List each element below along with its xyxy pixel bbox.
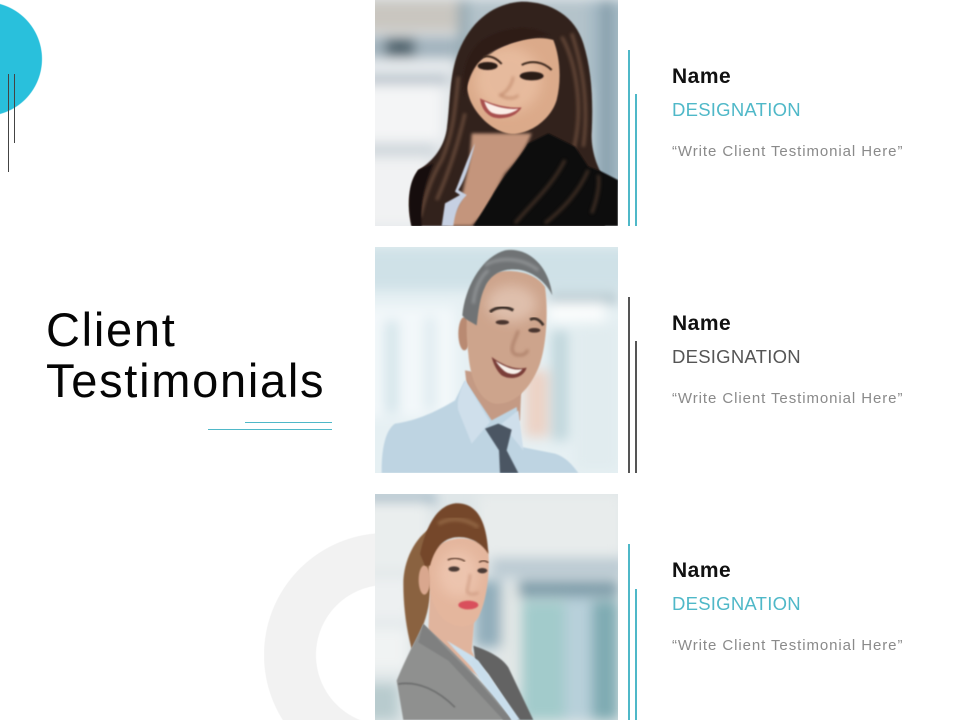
neck and chest — [428, 591, 478, 676]
face — [467, 271, 547, 404]
eyes — [478, 62, 498, 70]
ear — [458, 317, 470, 350]
designation 1: DESIGNATION — [672, 99, 801, 120]
nose shadow — [500, 77, 518, 98]
shirt — [447, 640, 508, 714]
neck — [465, 370, 522, 429]
face — [428, 538, 489, 626]
eyes — [496, 320, 509, 325]
mouth — [492, 357, 527, 378]
title underline short — [245, 422, 332, 423]
photo: woman with dark hair — [375, 0, 618, 226]
neck and chest — [447, 133, 532, 226]
designation 2: DESIGNATION — [672, 346, 801, 367]
bars: testimonial 2 long — [628, 297, 630, 473]
blazer left — [397, 624, 512, 720]
title underline long — [208, 429, 332, 430]
jacket — [473, 133, 618, 226]
nose — [467, 574, 478, 594]
accent line short — [14, 74, 15, 143]
accent line long — [8, 74, 9, 172]
eyebrows — [490, 308, 513, 312]
photo: woman in grey blazer — [375, 494, 618, 720]
face — [467, 38, 560, 134]
ear — [419, 565, 430, 595]
shirt — [382, 380, 578, 473]
bars: testimonial 1 short — [635, 94, 637, 226]
bars: testimonial 3 short — [635, 589, 637, 720]
ponytail — [402, 529, 431, 649]
tie — [485, 424, 518, 473]
testimonial text 2: “Write Client Testimonial Here” — [672, 390, 903, 407]
blazer right — [473, 646, 533, 720]
name 1: Name — [672, 65, 731, 88]
name 2: Name — [672, 312, 731, 335]
hair — [409, 2, 605, 226]
testimonial text 3: “Write Client Testimonial Here” — [672, 637, 903, 654]
testimonial text 1: “Write Client Testimonial Here” — [672, 143, 903, 160]
photo: grey-haired man — [375, 247, 618, 473]
bars: testimonial 3 long — [628, 544, 630, 720]
title: Testimonials — [46, 354, 325, 407]
decorative grey ring — [264, 533, 508, 720]
lips — [458, 601, 478, 609]
title: Client — [46, 303, 176, 356]
shirt inner — [454, 649, 520, 720]
hair top — [420, 503, 488, 566]
hair — [462, 250, 552, 325]
decorative circle top left — [0, 2, 43, 116]
nose — [512, 330, 528, 355]
mouth — [480, 98, 522, 118]
eyebrows — [448, 558, 465, 561]
title — [46, 303, 325, 407]
bars: testimonial 2 short — [635, 341, 637, 473]
hair fringe — [464, 36, 538, 91]
name 3: Name — [672, 559, 731, 582]
eyebrows — [483, 56, 502, 64]
eyes — [448, 566, 460, 572]
bars: testimonial 1 long — [628, 50, 630, 226]
designation 3: DESIGNATION — [672, 593, 801, 614]
shirt — [442, 143, 475, 226]
